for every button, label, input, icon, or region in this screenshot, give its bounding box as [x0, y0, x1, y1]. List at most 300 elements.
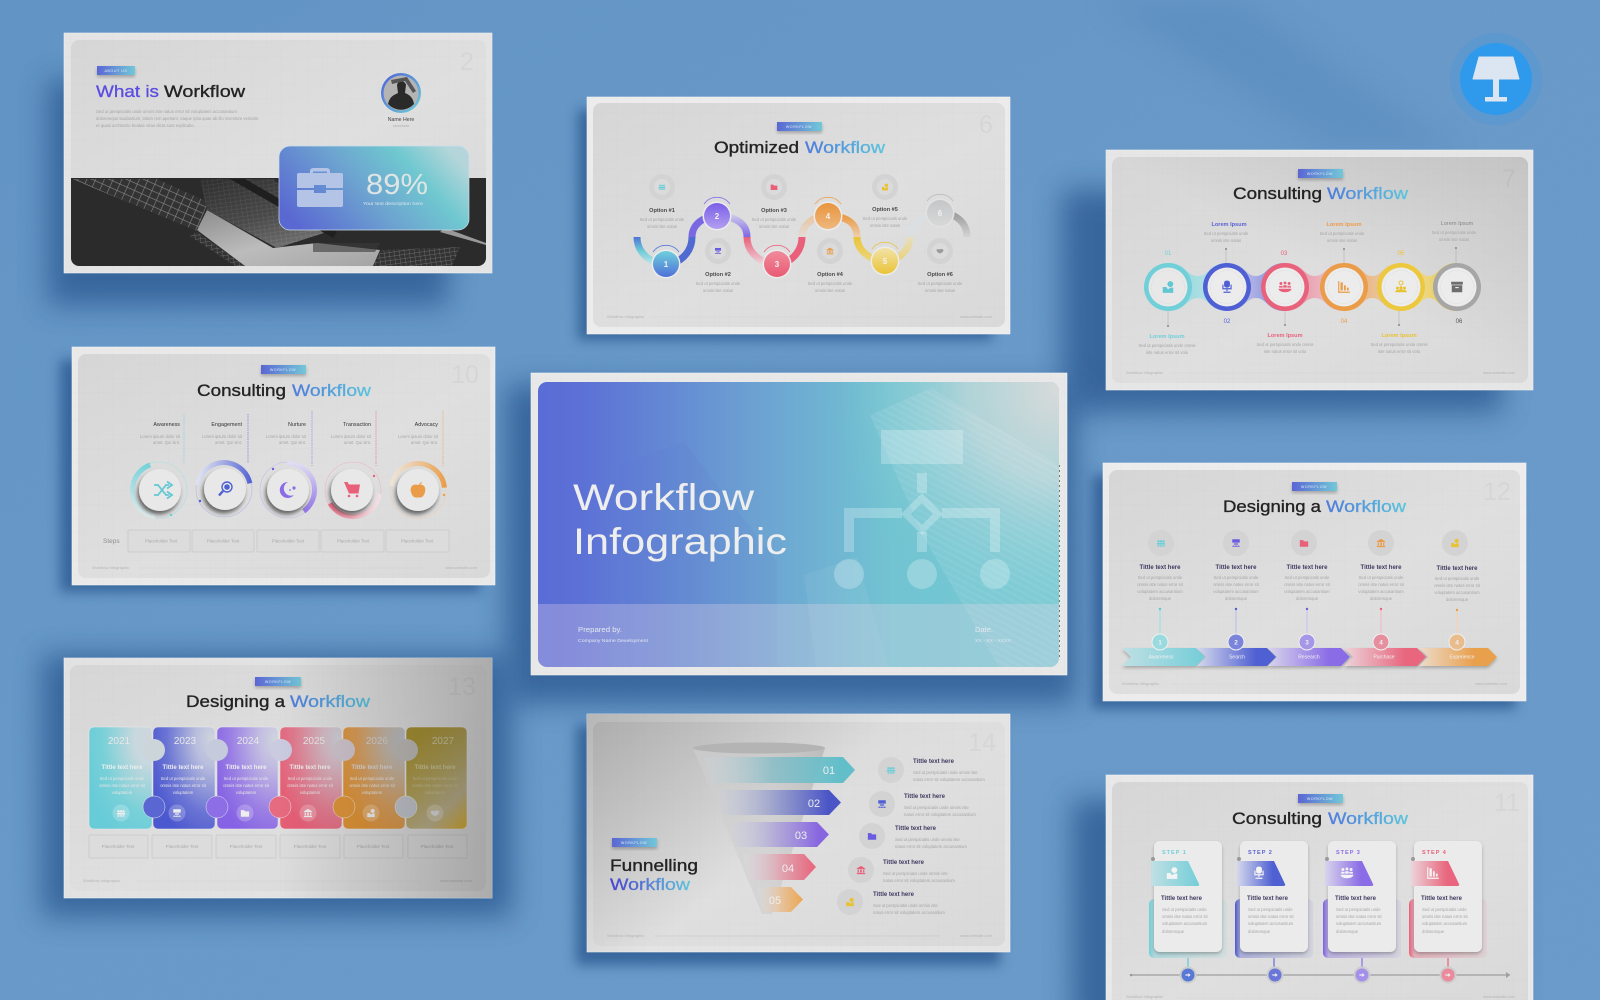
option 1: Option #1	[649, 208, 675, 214]
node 4: 4	[826, 212, 831, 221]
column 3: Tittle text here	[1287, 565, 1328, 571]
piece body text: Sed ut perspiciatis unde	[413, 776, 458, 781]
option 2	[696, 238, 741, 293]
column 4: doloremque	[1370, 596, 1393, 601]
body text	[96, 109, 258, 128]
step numbers: 05	[1398, 251, 1405, 257]
item 3: natus error sit voluptatem accusantium	[895, 844, 967, 849]
item 2: Sed ut perspiciatis unde omnis iste	[904, 805, 969, 810]
stage: Transaction: amet. Qui sint.	[344, 440, 371, 445]
heading: Consulting Workflow: Workflow	[1327, 184, 1409, 203]
numbered pins: 4	[1379, 640, 1383, 646]
funnel arrow 01: 01	[823, 765, 835, 777]
funnel arrow 04: 04	[782, 863, 794, 875]
item 2	[869, 791, 976, 817]
arrow labels: Research	[1298, 654, 1320, 660]
column 2: doloremque	[1225, 596, 1248, 601]
step numbers: 03	[1281, 251, 1288, 257]
item 5: Tittle text here	[873, 892, 915, 898]
step card 4: Sed ut perspiciatis unde	[1422, 907, 1467, 912]
badge: Workflow: WORKFLOW	[265, 680, 291, 684]
piece body text: Sed ut perspiciatis unde	[350, 776, 395, 781]
piece body text: voluptatem	[236, 790, 257, 795]
node 6: 6	[938, 209, 943, 218]
step card 3: Sed ut perspiciatis unde	[1336, 907, 1381, 912]
step card 3: Tittle text here	[1335, 896, 1377, 902]
funnel arrow 02: 02	[808, 798, 820, 810]
option 4: omnis iste natus	[815, 288, 845, 293]
step card 3: voluptatem accusantium	[1336, 921, 1382, 926]
option 1: omnis iste natus	[647, 224, 677, 229]
piece body text: omnis iste natus error sit	[223, 783, 270, 788]
option 3: Sed ut perspiciatis unde	[752, 217, 797, 222]
step card 4: doloremque	[1422, 929, 1445, 934]
stage: Awareness: amet. Qui sint.	[153, 440, 180, 445]
funnel arrow 01	[705, 757, 855, 783]
heading: What is Workflow: Workflow	[164, 82, 246, 101]
prepared by	[578, 627, 649, 643]
item 4: natus error sit voluptatem accusantium	[883, 878, 955, 883]
step card 4: voluptatem accusantium	[1422, 921, 1468, 926]
lower labels: iste natus error sit volu	[1264, 349, 1307, 354]
puzzle timeline	[89, 727, 467, 829]
footer: Workflow Infographic	[92, 565, 129, 570]
stage: Transaction: Lorem ipsum dolor sit	[331, 434, 372, 439]
item 4: Sed ut perspiciatis unde omnis iste	[883, 871, 948, 876]
page number 10: 10	[451, 361, 479, 389]
page number 6: 6	[979, 111, 993, 139]
piece titles	[102, 765, 456, 771]
card caption: Your text description here	[363, 201, 423, 206]
piece body text: voluptatem	[425, 790, 446, 795]
piece body text: omnis iste natus error sit	[412, 783, 459, 788]
numbered pins: 1	[1158, 640, 1162, 646]
upper labels: omnis iste natus	[1211, 238, 1241, 243]
piece titles: Tittle text here	[163, 765, 204, 771]
option 2: Sed ut perspiciatis unde	[696, 281, 741, 286]
body text: doloremque laudantium, totam rem aperiam, eaque ipsa quae ab illo inventore veritatis	[96, 116, 258, 121]
node 4	[814, 197, 842, 230]
item 2: Tittle text here	[904, 794, 946, 800]
option 5: omnis iste natus	[870, 223, 900, 228]
badge: Workflow	[612, 838, 657, 847]
heading: Consulting Workflow: Consulting	[1232, 809, 1322, 828]
column 4: voluptatem accusantium	[1358, 589, 1404, 594]
item 1: natus error sit voluptatem accusantium	[913, 777, 985, 782]
node 5: 5	[883, 257, 888, 266]
piece body text: voluptatem	[173, 790, 194, 795]
arrow labels: Search	[1229, 654, 1245, 660]
step card 2: Tittle text here	[1247, 896, 1289, 902]
icon: Keynote app badge	[1450, 33, 1542, 125]
upper labels: omnis iste natus	[1327, 238, 1357, 243]
step numbers: 02	[1224, 319, 1231, 325]
page number 11: 11	[1494, 789, 1520, 817]
date	[975, 627, 1011, 643]
footer	[83, 878, 473, 883]
icon: apple	[411, 482, 425, 498]
column 4: omnis iste natus error sit	[1358, 582, 1405, 587]
timeline	[1130, 958, 1510, 984]
lower labels	[1138, 311, 1428, 355]
option 2: Option #2	[705, 272, 731, 278]
heading: Consulting Workflow: Workflow	[1328, 809, 1409, 828]
step card 2: Sed ut perspiciatis unde	[1248, 907, 1293, 912]
badge: Workflow	[1298, 169, 1343, 178]
steps row: Placeholder Text	[401, 538, 434, 544]
prepared by: Company Name Development	[578, 638, 649, 643]
step card 3: STEP 3	[1336, 850, 1361, 856]
item 5: Sed ut perspiciatis unde omnis iste	[873, 903, 938, 908]
footer: www.website.com	[445, 565, 478, 570]
lower labels: iste natus error sit volu	[1146, 350, 1189, 355]
placeholder boxes	[89, 835, 467, 858]
heading: Optimized Workflow: Workflow	[805, 138, 886, 157]
step card 2: STEP 2	[1248, 850, 1273, 856]
column 1: Sed ut perspiciatis unde	[1138, 575, 1183, 580]
heading: Funnelling Workflow: Funnelling	[610, 856, 698, 875]
footer	[607, 314, 993, 319]
heading: Consulting Workflow	[197, 381, 372, 400]
panel: Consulting Workflow ring slide	[72, 347, 495, 585]
steps row: Placeholder Text	[207, 538, 240, 544]
badge: Workflow	[777, 122, 822, 131]
stage: Engagement	[193, 414, 255, 520]
column 3: voluptatem accusantium	[1284, 589, 1330, 594]
piece body text: omnis iste natus error sit	[160, 783, 207, 788]
arrow labels: Experience	[1449, 654, 1475, 660]
item 2: natus error sit voluptatem accusantium	[904, 812, 976, 817]
step 04 circle	[1320, 263, 1368, 311]
footer: Workflow Infographic	[607, 314, 644, 319]
column 3: Sed ut perspiciatis unde	[1285, 575, 1330, 580]
stage: Engagement: Lorem ipsum dolor sit	[202, 434, 243, 439]
footer: www.website.com	[440, 878, 473, 883]
option 5	[863, 174, 908, 228]
option 4: Sed ut perspiciatis unde	[808, 281, 853, 286]
option 3: omnis iste natus	[759, 224, 789, 229]
upper labels: Sed ut perspiciatis unde	[1320, 231, 1365, 236]
badge: About us	[97, 66, 135, 75]
wave timeline with numbered nodes	[637, 194, 967, 278]
option 3: Option #3	[761, 208, 787, 214]
item 3	[859, 823, 967, 849]
column 1: omnis iste natus error sit	[1137, 582, 1184, 587]
footer: www.website.com	[960, 933, 993, 938]
column 1: doloremque	[1149, 596, 1172, 601]
heading: Optimized Workflow	[714, 138, 886, 157]
footer	[1126, 370, 1516, 375]
panel: Optimized Workflow slide	[587, 97, 1010, 334]
item 5	[837, 889, 945, 915]
item 3: Tittle text here	[895, 826, 937, 832]
column 3: omnis iste natus error sit	[1284, 582, 1331, 587]
option 5: Option #5	[872, 207, 898, 213]
option 6: Sed ut perspiciatis unde	[918, 281, 963, 286]
heading: Designing a Workflow: Workflow	[290, 692, 371, 711]
heading: Designing a Workflow: Workflow	[1326, 497, 1407, 516]
panel: Consulting Workflow step cards slide	[1106, 775, 1533, 1000]
step 06 circle	[1433, 263, 1481, 311]
step card 1: voluptatem accusantium	[1162, 921, 1208, 926]
piece titles: Tittle text here	[226, 765, 267, 771]
stage: Transaction: Transaction	[343, 422, 371, 428]
date: XX - XX - XXXX	[975, 638, 1011, 643]
step 02 circle	[1203, 263, 1251, 311]
funnel arrow 04	[743, 854, 816, 880]
option 1: Sed ut perspiciatis unde	[640, 217, 685, 222]
column 2: Sed ut perspiciatis unde	[1214, 575, 1259, 580]
step card 1: STEP 1	[1162, 850, 1187, 856]
heading: Consulting Workflow: Workflow	[292, 381, 372, 400]
footer	[1122, 681, 1508, 686]
badge: Workflow	[255, 677, 301, 686]
step numbers: 04	[1341, 319, 1348, 325]
piece body text: omnis iste natus error sit	[99, 783, 146, 788]
piece icons	[112, 804, 444, 822]
heading: Designing a Workflow	[186, 692, 371, 711]
numbered pins	[1152, 608, 1465, 650]
panel: Designing a Workflow arrow slide	[1103, 463, 1526, 701]
panel: What is Workflow slide	[64, 33, 492, 273]
column 3	[1284, 530, 1331, 601]
presenter name	[388, 117, 414, 128]
footer	[92, 565, 478, 570]
column 1	[1137, 530, 1184, 601]
statistic 89%: 89%	[366, 169, 428, 201]
stage: Engagement: amet. Qui sint.	[215, 440, 242, 445]
piece body text: omnis iste natus error sit	[287, 783, 334, 788]
step card 4: omnis iste natus error sit	[1422, 914, 1468, 919]
page number 12: 12	[1483, 478, 1511, 506]
item 1: Sed ut perspiciatis unde omnis iste	[913, 770, 978, 775]
circle chain connector	[1168, 263, 1457, 311]
node 1	[652, 245, 680, 278]
piece titles: Tittle text here	[415, 765, 456, 771]
node 2	[702, 197, 732, 230]
step card 1: Sed ut perspiciatis unde	[1162, 907, 1207, 912]
step numbers: 01	[1165, 251, 1172, 257]
heading: Consulting Workflow: Consulting	[1233, 184, 1322, 203]
lower labels: Lorem Ipsum	[1149, 334, 1185, 340]
icon: briefcase	[297, 168, 343, 207]
badge: Workflow: WORKFLOW	[621, 841, 647, 845]
icon: shopping cart	[344, 482, 360, 497]
footer: www.website.com	[1483, 370, 1516, 375]
column 2: Tittle text here	[1216, 565, 1257, 571]
stage: Engagement: Engagement	[211, 422, 242, 428]
numbered pins: 4	[1455, 640, 1459, 646]
node 1: 1	[664, 260, 669, 269]
steps row: Placeholder Text	[337, 538, 370, 544]
step card 2: voluptatem accusantium	[1248, 921, 1294, 926]
option 4: Option #4	[817, 272, 844, 278]
step card 3	[1323, 841, 1401, 958]
stage: Nurture: Nurture	[288, 422, 306, 428]
piece body text: voluptatem	[112, 790, 133, 795]
funnel arrow 03	[730, 822, 829, 847]
node 3	[762, 245, 792, 278]
page number 7: 7	[1502, 165, 1516, 193]
option 2: omnis iste natus	[703, 288, 733, 293]
panel: Funnelling Workflow slide	[587, 714, 1010, 952]
piece body text: omnis iste natus error sit	[349, 783, 396, 788]
lower labels: Sed ut perspiciatis unde omnis	[1256, 342, 1314, 347]
steps row: Steps	[103, 538, 120, 545]
step numbers	[1165, 251, 1463, 325]
node 3: 3	[775, 260, 780, 269]
presenter name: xx/xx/xxxx	[393, 124, 409, 128]
panel: cover slide Workflow Infographic	[531, 373, 1067, 675]
heading: What is Workflow: What is	[96, 82, 159, 101]
item 3: Sed ut perspiciatis unde omnis iste	[895, 837, 960, 842]
page number 14: 14	[968, 729, 996, 757]
photo: black and white skyscrapers	[71, 178, 486, 266]
heading: Consulting Workflow: Consulting	[197, 381, 286, 400]
piece titles: Tittle text here	[352, 765, 393, 771]
year labels: 2026	[366, 736, 389, 747]
heading: Consulting Workflow	[1232, 809, 1409, 828]
badge: Workflow	[261, 365, 306, 374]
lower labels: Lorem Ipsum	[1381, 333, 1417, 339]
item 1: Tittle text here	[913, 759, 955, 765]
arrow labels	[1149, 654, 1475, 660]
step card 1: Tittle text here	[1161, 896, 1203, 902]
node 6	[926, 194, 954, 228]
stage: Nurture	[260, 411, 316, 518]
option 6: omnis iste natus	[925, 288, 955, 293]
piece titles: Tittle text here	[290, 765, 331, 771]
badge: Workflow: WORKFLOW	[1307, 172, 1333, 176]
column 2: omnis iste natus error sit	[1213, 582, 1260, 587]
step 05 circle	[1377, 263, 1425, 311]
upper labels: Sed ut perspiciatis unde	[1204, 231, 1249, 236]
stage: Advocacy: Lorem ipsum dolor sit	[398, 434, 439, 439]
piece body text: Sed ut perspiciatis unde	[224, 776, 269, 781]
column 4	[1358, 530, 1405, 601]
option 3	[752, 174, 797, 229]
cover title: Infographic	[573, 520, 787, 562]
upper labels: omnis iste natus	[1439, 237, 1469, 242]
bottom band	[538, 604, 1059, 667]
column 2: voluptatem accusantium	[1213, 589, 1259, 594]
body text: et quasi architecto beatae vitae dicta sunt explicabo.	[96, 123, 195, 128]
upper labels	[1204, 221, 1477, 263]
option 6	[918, 238, 963, 293]
heading: Funnelling Workflow	[610, 856, 698, 894]
column 5: Sed ut perspiciatis unde	[1435, 576, 1480, 581]
lower labels: Sed ut perspiciatis unde omnis	[1370, 342, 1428, 347]
steps row	[103, 530, 449, 552]
column 5: voluptatem accusantium	[1434, 590, 1480, 595]
step card 1: doloremque	[1162, 929, 1185, 934]
piece body text: Sed ut perspiciatis unde	[161, 776, 206, 781]
step card 1	[1149, 841, 1227, 958]
step card 4: STEP 4	[1422, 850, 1447, 856]
page number 13: 13	[448, 673, 476, 701]
cover title: Workflow	[573, 476, 755, 518]
lower labels: iste natus error sit volu	[1378, 349, 1421, 354]
column 5: omnis iste natus error sit	[1434, 583, 1481, 588]
column 5: doloremque	[1446, 597, 1469, 602]
upper labels: Lorem Ipsum	[1441, 221, 1474, 227]
column 4: Tittle text here	[1361, 565, 1402, 571]
stage: Nurture: amet. Qui sint.	[279, 440, 306, 445]
step card 3: omnis iste natus error sit	[1336, 914, 1382, 919]
upper labels: Lorem Ipsum	[1211, 222, 1247, 228]
stage: Awareness	[128, 414, 190, 521]
footer: www.website.com	[960, 314, 993, 319]
prepared by: Prepared by.	[578, 627, 622, 634]
badge: Workflow	[1298, 794, 1343, 803]
badge: About us: ABOUT US	[104, 69, 128, 73]
piece body text: Sed ut perspiciatis unde	[100, 776, 145, 781]
column 5	[1434, 530, 1481, 602]
placeholder boxes: Placeholder Text	[102, 844, 135, 849]
funnel graphic	[693, 742, 825, 914]
year labels: 2023	[174, 736, 197, 747]
option 5: Sed ut perspiciatis unde	[863, 216, 908, 221]
heading: Designing a Workflow	[1223, 497, 1407, 516]
placeholder boxes: Placeholder Text	[357, 844, 390, 849]
stage: Nurture: Lorem ipsum dolor sit	[266, 434, 307, 439]
funnel arrow 05	[757, 887, 803, 912]
step card 4	[1409, 841, 1487, 958]
step 01 circle	[1144, 263, 1192, 311]
step card 2	[1235, 841, 1313, 958]
faint buildings	[620, 388, 1059, 667]
column 1: Tittle text here	[1140, 565, 1181, 571]
piece titles: Tittle text here	[102, 765, 143, 771]
upper labels: Lorem Ipsum	[1326, 222, 1362, 228]
footer: Workflow Infographic	[607, 933, 644, 938]
heading: What is Workflow	[96, 82, 246, 101]
option 1	[640, 174, 685, 229]
footer: www.website.com	[1475, 681, 1508, 686]
funnel arrow 05: 05	[769, 895, 781, 907]
step card 1: omnis iste natus error sit	[1162, 914, 1208, 919]
heading: Consulting Workflow	[1233, 184, 1409, 203]
item 1	[878, 757, 985, 783]
arrow labels: Purchase	[1373, 654, 1395, 660]
footer: Workflow Infographic	[83, 878, 120, 883]
avatar: presenter photo	[381, 73, 421, 113]
badge: Workflow: WORKFLOW	[1301, 485, 1327, 489]
heading: Designing a Workflow: Designing a	[1223, 497, 1322, 516]
column 2	[1213, 530, 1260, 601]
item 4	[848, 857, 955, 883]
icon: magnifier	[219, 482, 232, 496]
year labels: 2025	[303, 736, 326, 747]
numbered pins: 2	[1234, 640, 1238, 646]
upper labels: Sed ut perspiciatis unde	[1432, 230, 1477, 235]
placeholder boxes: Placeholder Text	[166, 844, 199, 849]
date: Date.	[975, 627, 993, 634]
item 4: Tittle text here	[883, 860, 925, 866]
option 4	[808, 238, 853, 293]
piece body text: voluptatem	[362, 790, 383, 795]
funnel arrow 02	[717, 790, 841, 815]
step 03 circle	[1261, 263, 1309, 311]
stage: Awareness: Awareness	[153, 422, 180, 428]
column 3: doloremque	[1296, 596, 1319, 601]
page number 2: 2	[460, 48, 474, 76]
footer: Workflow Infographic	[1122, 681, 1159, 686]
cover title	[573, 476, 787, 562]
item 5: natus error sit voluptatem accusantium	[873, 910, 945, 915]
step card 4: Tittle text here	[1421, 896, 1463, 902]
node 5	[870, 242, 900, 276]
